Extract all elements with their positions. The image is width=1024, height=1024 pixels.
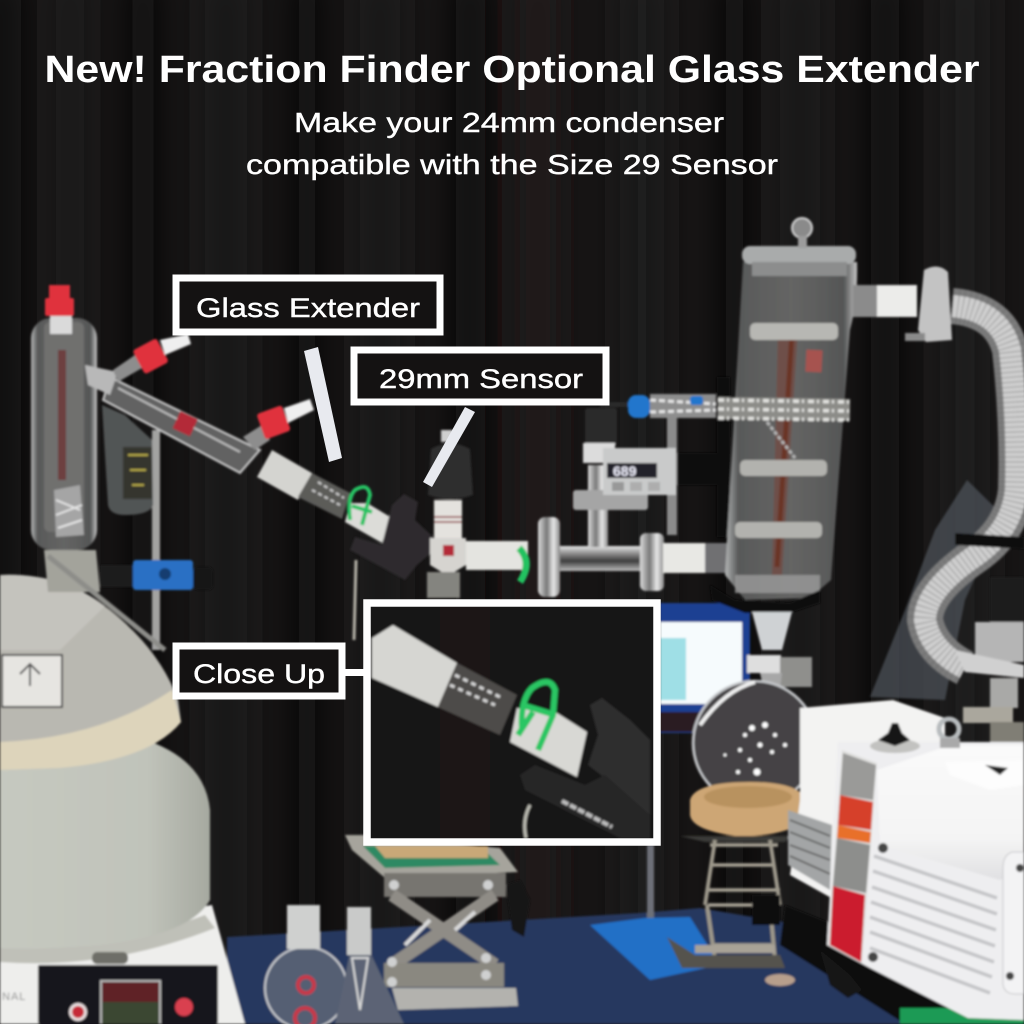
metal chain band — [718, 408, 850, 410]
table with blue cloth — [227, 908, 905, 1024]
eye bolt — [939, 719, 959, 739]
arrow patch — [2, 655, 62, 707]
data plate — [828, 750, 877, 963]
centre lab jack — [345, 835, 530, 1010]
white joint — [877, 285, 917, 317]
cooling ribs — [870, 856, 997, 993]
support stand — [152, 430, 160, 650]
top sticker — [945, 760, 1024, 790]
subtitle: Make your 24mm condenser — [294, 107, 724, 138]
heating mantle — [0, 575, 181, 770]
water bath — [0, 738, 210, 949]
red logo — [173, 411, 198, 436]
red cap lower — [256, 405, 291, 440]
hot plate control base: NAL — [2, 991, 26, 1003]
label: Close Up: Close Up — [193, 659, 325, 689]
29mm sensor adapter — [427, 430, 473, 598]
right stand and clamp — [955, 533, 1024, 748]
white nozzle top — [160, 334, 191, 355]
cork ring — [690, 782, 808, 836]
diagonal strap to mantle — [48, 556, 165, 650]
stand rod behind trap — [667, 377, 730, 537]
vacuum hose — [853, 266, 1016, 668]
arrow: glass extender pointer — [304, 347, 342, 462]
red cap — [49, 285, 70, 299]
plastic sheet — [870, 480, 1018, 700]
oil cap knob — [870, 739, 920, 753]
sensor wire — [354, 560, 356, 640]
label: Close Up — [176, 646, 342, 696]
power plug — [820, 950, 862, 998]
label: Glass Extender — [176, 278, 440, 332]
back pump — [788, 700, 945, 900]
right panel — [1003, 852, 1024, 994]
vertical chrome sensor — [573, 408, 648, 510]
horizontal distillation tube — [466, 465, 737, 597]
white nozzle lower — [284, 399, 314, 423]
lower neck — [44, 550, 100, 592]
close up frame — [367, 603, 657, 842]
small glass flasks — [265, 905, 404, 1024]
blue valve cross bar — [600, 394, 716, 418]
digital vacuum gauge — [603, 448, 676, 495]
red cap top — [132, 338, 169, 374]
glass rings — [750, 323, 838, 340]
monitor behind — [660, 603, 750, 733]
bolts — [878, 843, 888, 853]
arrow: sensor pointer — [423, 407, 475, 487]
black support — [710, 585, 820, 613]
large cold trap — [710, 218, 857, 690]
ground joint — [257, 450, 312, 500]
angled condenser glass — [85, 334, 392, 543]
blue clamp holder — [100, 560, 213, 590]
label: 29mm Sensor: 29mm Sensor — [379, 364, 583, 394]
label: Glass Extender: Glass Extender — [196, 293, 420, 323]
dark floor area under pump — [780, 905, 1024, 1024]
green circuit board — [900, 1008, 1024, 1024]
black sensor clamp — [350, 494, 433, 580]
collection flask — [693, 681, 817, 805]
digital vacuum gauge: 689 — [613, 463, 637, 479]
close up inset photo — [367, 603, 657, 842]
KF clamp — [918, 266, 952, 342]
title: New! Fraction Finder Optional Glass Extender — [44, 49, 980, 91]
extender glass — [298, 473, 350, 519]
connector line: close up label to inset — [342, 669, 368, 676]
white end — [345, 503, 392, 543]
left vertical condenser — [31, 285, 100, 592]
green clip — [349, 487, 372, 525]
hot plate control base — [0, 905, 245, 1024]
subtitle: compatible with the Size 29 Sensor — [246, 149, 778, 180]
side arm glass — [853, 285, 877, 317]
cork debris on table — [765, 974, 795, 986]
stand pole and blue base — [590, 845, 720, 980]
front pump — [827, 719, 1024, 1020]
lid — [742, 246, 856, 264]
handheld vacuum meter — [102, 405, 153, 515]
label: 29mm Sensor — [354, 350, 606, 402]
right lab jack — [667, 836, 790, 968]
subtitle — [246, 107, 778, 180]
